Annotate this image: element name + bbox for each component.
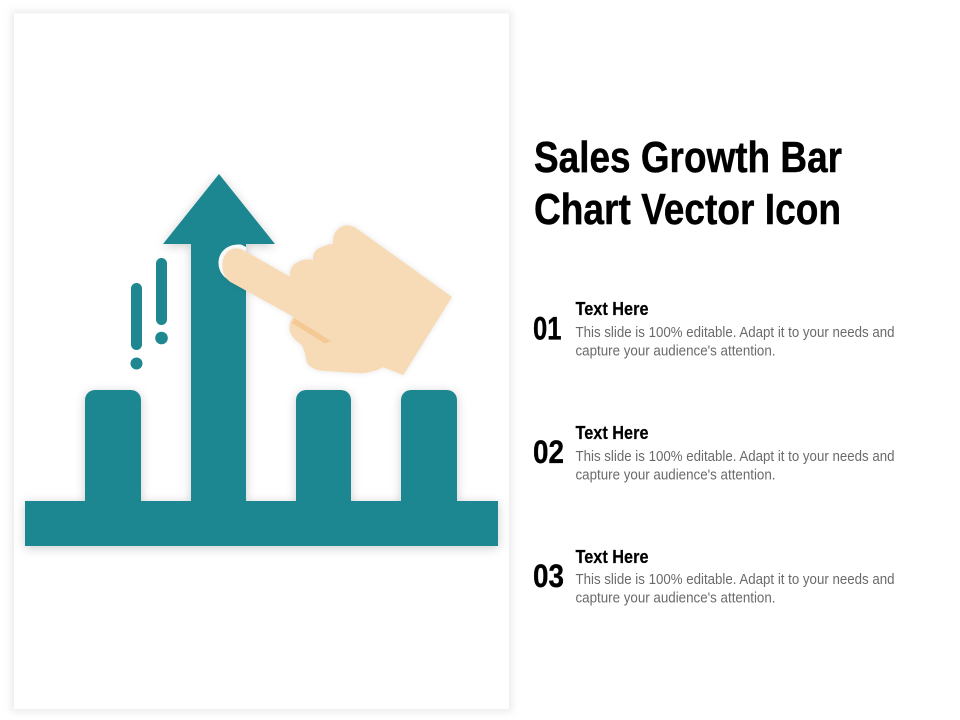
number 01: 01 (533, 310, 562, 346)
body text 03 (576, 572, 894, 606)
list item 01 (533, 299, 894, 360)
body text 01: This slide is 100% editable. Adapt it to your needs and (576, 325, 894, 341)
list item 03 (533, 547, 894, 606)
icon: pointing hand (218, 225, 452, 375)
chart bars and base (25, 174, 498, 546)
list item 02 (533, 423, 894, 484)
body text 03: This slide is 100% editable. Adapt it to your needs and (576, 572, 894, 588)
body text 02 (576, 449, 894, 484)
icon: sales growth bar chart (25, 174, 498, 546)
number 03: 03 (533, 558, 564, 594)
heading 02: Text Here (576, 423, 648, 443)
body text 01: capture your audience's attention. (576, 344, 776, 360)
body text 01 (576, 325, 894, 360)
heading 03: Text Here (576, 547, 648, 567)
panel: icon card (11, 11, 512, 712)
body text 02: This slide is 100% editable. Adapt it to your needs and (576, 449, 894, 465)
title: Chart Vector Icon (534, 185, 841, 234)
icon: right exclamation mark (155, 258, 168, 344)
title (534, 133, 842, 234)
body text 02: capture your audience's attention. (576, 468, 776, 484)
title: Sales Growth Bar (534, 133, 842, 182)
icon: left exclamation mark (130, 283, 142, 370)
heading 01: Text Here (576, 299, 648, 319)
number 02: 02 (533, 434, 564, 470)
body text 03: capture your audience's attention. (576, 590, 776, 606)
